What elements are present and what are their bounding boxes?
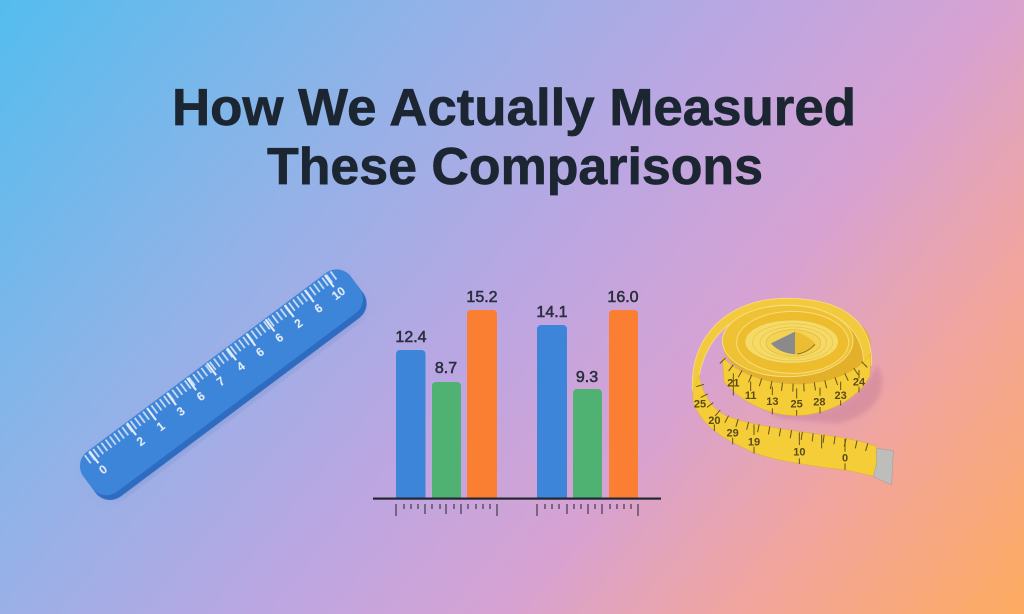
tail numbers: 20	[708, 415, 720, 427]
icon: blue ruler: 6	[253, 344, 267, 360]
icon: blue ruler: 3	[174, 404, 188, 419]
icon: blue ruler: 1	[154, 419, 168, 434]
icon: blue ruler	[73, 262, 375, 509]
coil inner base	[723, 305, 871, 384]
tape tail	[693, 375, 877, 477]
icon: blue ruler: 2	[134, 434, 148, 449]
icon: blue ruler: 2	[292, 316, 306, 331]
coil band numbers: 28	[813, 397, 825, 409]
bars: group two	[537, 310, 638, 498]
tail numbers: 25	[694, 398, 706, 410]
value labels: 8.7	[435, 360, 457, 377]
icon: blue ruler: 6	[194, 389, 208, 404]
tail numbers: 19	[748, 437, 760, 449]
coil band numbers	[727, 377, 866, 410]
title: These Comparisons	[267, 138, 763, 196]
coil inner rings	[722, 305, 853, 377]
value labels: 9.3	[576, 369, 598, 386]
value labels	[395, 289, 639, 386]
coil band numbers: 25	[791, 398, 803, 410]
metal tip	[873, 448, 893, 485]
tail numbers: 10	[793, 447, 805, 459]
value labels: 16.0	[607, 289, 639, 306]
tail numbers: 29	[727, 428, 739, 440]
bar chart	[373, 289, 661, 516]
title: How We Actually Measured	[172, 79, 856, 137]
coil band numbers: 21	[727, 377, 739, 389]
coil band numbers: 13	[766, 396, 778, 408]
icon: blue ruler: 6	[312, 301, 326, 316]
value labels: 14.1	[536, 304, 568, 321]
tail minor ticks	[700, 385, 872, 449]
bars: group one	[396, 310, 497, 498]
icon: blue ruler: 7	[214, 374, 228, 389]
icon: blue ruler: 10	[329, 284, 348, 303]
icon: blue ruler: 4	[234, 359, 248, 374]
coil band numbers: 24	[853, 377, 866, 389]
coil band minor ticks	[722, 357, 871, 388]
tape shadow	[747, 365, 882, 423]
tail major ticks	[714, 424, 845, 470]
axis ticks	[396, 504, 638, 516]
coil band major ticks	[733, 370, 859, 416]
coil front band	[722, 353, 871, 416]
title	[172, 79, 856, 196]
icon: blue ruler: 6	[272, 330, 286, 345]
coil band numbers: 11	[745, 390, 756, 402]
icon: blue ruler: 0	[96, 462, 110, 477]
value labels: 15.2	[466, 289, 498, 306]
outer coil back strip	[692, 298, 872, 392]
tail numbers	[694, 398, 848, 464]
tail numbers: 0	[842, 452, 848, 464]
value labels: 12.4	[395, 329, 427, 346]
icon: yellow tape measure	[692, 298, 893, 485]
center hole	[771, 332, 815, 354]
coil band numbers: 23	[835, 390, 847, 402]
axis line	[373, 498, 661, 500]
